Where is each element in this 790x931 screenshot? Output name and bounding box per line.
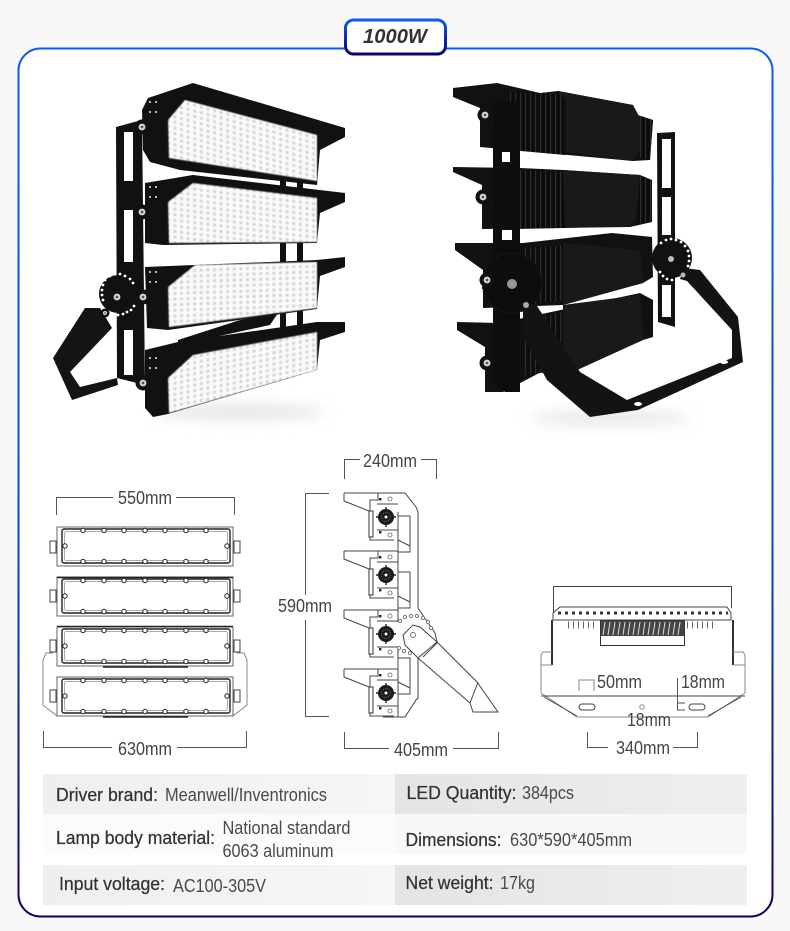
module 2 rear bbox=[453, 167, 652, 229]
lamp body material bbox=[56, 817, 350, 861]
left vertical bracket bbox=[493, 100, 520, 392]
side lugs bbox=[50, 541, 240, 702]
vertical bracket bbox=[116, 120, 145, 385]
four module outlines bbox=[57, 527, 233, 716]
mounting bracket bbox=[541, 652, 745, 717]
module ends bbox=[344, 493, 398, 716]
dial holes bbox=[397, 614, 433, 655]
net weight: Net weight: bbox=[406, 872, 494, 893]
right vertical bracket bbox=[657, 132, 675, 327]
18mm callout right: 18mm bbox=[681, 671, 725, 692]
driver brand bbox=[56, 784, 327, 805]
large mounting arm bbox=[523, 268, 743, 417]
module 2 bbox=[134, 175, 345, 245]
630mm dimension: 630mm bbox=[118, 738, 172, 759]
590mm dimension: 590mm bbox=[278, 595, 332, 616]
550mm dimension bbox=[56, 487, 234, 515]
floor shadow bbox=[530, 411, 690, 425]
module 1 bbox=[134, 83, 345, 185]
arm bbox=[403, 625, 498, 712]
dimensions bbox=[406, 829, 632, 850]
50mm callout bbox=[579, 671, 642, 692]
module 4 bbox=[136, 313, 345, 417]
630mm dimension bbox=[44, 731, 246, 759]
lamp strip bbox=[553, 607, 731, 625]
front view photo: floodlight with four LED modules bbox=[53, 83, 345, 420]
50mm callout: 50mm bbox=[597, 671, 642, 692]
18mm callout right bbox=[678, 671, 725, 710]
centre heat sink bbox=[600, 620, 684, 646]
lamp body material: 6063 aluminum bbox=[222, 840, 334, 861]
dimensions: Dimensions: bbox=[406, 829, 502, 850]
driver brand: Meanwell/Inventronics bbox=[165, 784, 327, 805]
340mm dimension bbox=[588, 732, 698, 758]
dimension drawing: front view bbox=[43, 487, 247, 759]
input voltage bbox=[59, 873, 267, 896]
rear knobs bbox=[476, 108, 494, 370]
input voltage: Input voltage: bbox=[59, 873, 165, 894]
bracket plate bbox=[383, 493, 437, 717]
lamp body material: National standard bbox=[222, 817, 350, 838]
18mm callout centre: 18mm bbox=[627, 709, 671, 730]
floor shadow bbox=[155, 404, 325, 420]
title badge: 1000W bbox=[346, 20, 446, 54]
405mm dimension: 405mm bbox=[394, 739, 448, 760]
240mm dimension: 240mm bbox=[363, 450, 417, 471]
405mm dimension bbox=[344, 732, 498, 760]
module 4 rear bbox=[457, 293, 653, 392]
side plates bbox=[552, 620, 733, 665]
adjustment dial bbox=[99, 273, 137, 318]
knobs bbox=[376, 507, 396, 703]
LED quantity: 384pcs bbox=[522, 782, 574, 803]
dimensions: 630*590*405mm bbox=[510, 829, 632, 850]
LED quantity bbox=[406, 782, 574, 803]
row backgrounds bbox=[43, 774, 747, 905]
lamp body material: Lamp body material: bbox=[56, 827, 215, 848]
driver brand: Driver brand: bbox=[56, 784, 158, 805]
left dial bbox=[482, 253, 542, 313]
rear posts bbox=[280, 175, 303, 340]
LED quantity: LED Quantity: bbox=[406, 782, 516, 803]
input voltage: AC100-305V bbox=[173, 875, 267, 896]
dimension drawing: side view bbox=[278, 450, 498, 760]
240mm dimension bbox=[344, 450, 436, 479]
specification table bbox=[43, 774, 747, 905]
module 3 bbox=[136, 257, 345, 330]
mounting arm bbox=[53, 308, 118, 400]
module 3 rear bbox=[455, 233, 653, 308]
550mm dimension: 550mm bbox=[118, 487, 172, 508]
module 1 rear bbox=[453, 83, 653, 161]
outline bbox=[554, 586, 732, 613]
mounting slots bbox=[579, 704, 705, 710]
590mm dimension bbox=[278, 494, 332, 716]
rear view photo: floodlight with heat sinks and arm bbox=[453, 83, 743, 425]
dimension drawing: bottom view bbox=[541, 586, 745, 758]
net weight: 17kg bbox=[500, 872, 535, 893]
title badge: 1000W: 1000W bbox=[363, 26, 429, 48]
340mm dimension: 340mm bbox=[616, 737, 670, 758]
arm outlines bbox=[43, 653, 247, 716]
right dial bbox=[652, 238, 692, 281]
